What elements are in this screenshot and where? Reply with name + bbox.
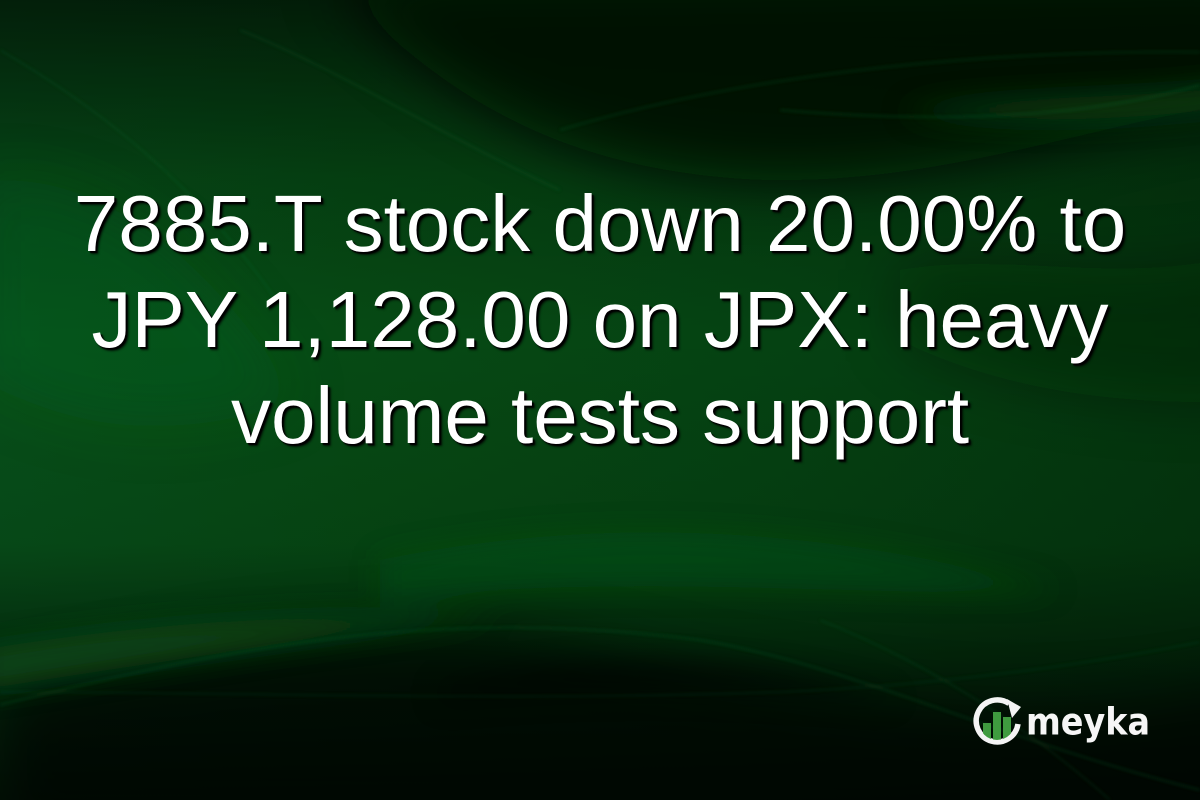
icon: ring with bars and arrow [976,699,1021,747]
title [74,179,1126,464]
title: volume tests support [231,371,969,460]
title: JPY 1,128.00 on JPX: heavy [92,275,1108,364]
title: 7885.T stock down 20.00% to [74,179,1126,268]
logo: meyka [973,697,1150,745]
